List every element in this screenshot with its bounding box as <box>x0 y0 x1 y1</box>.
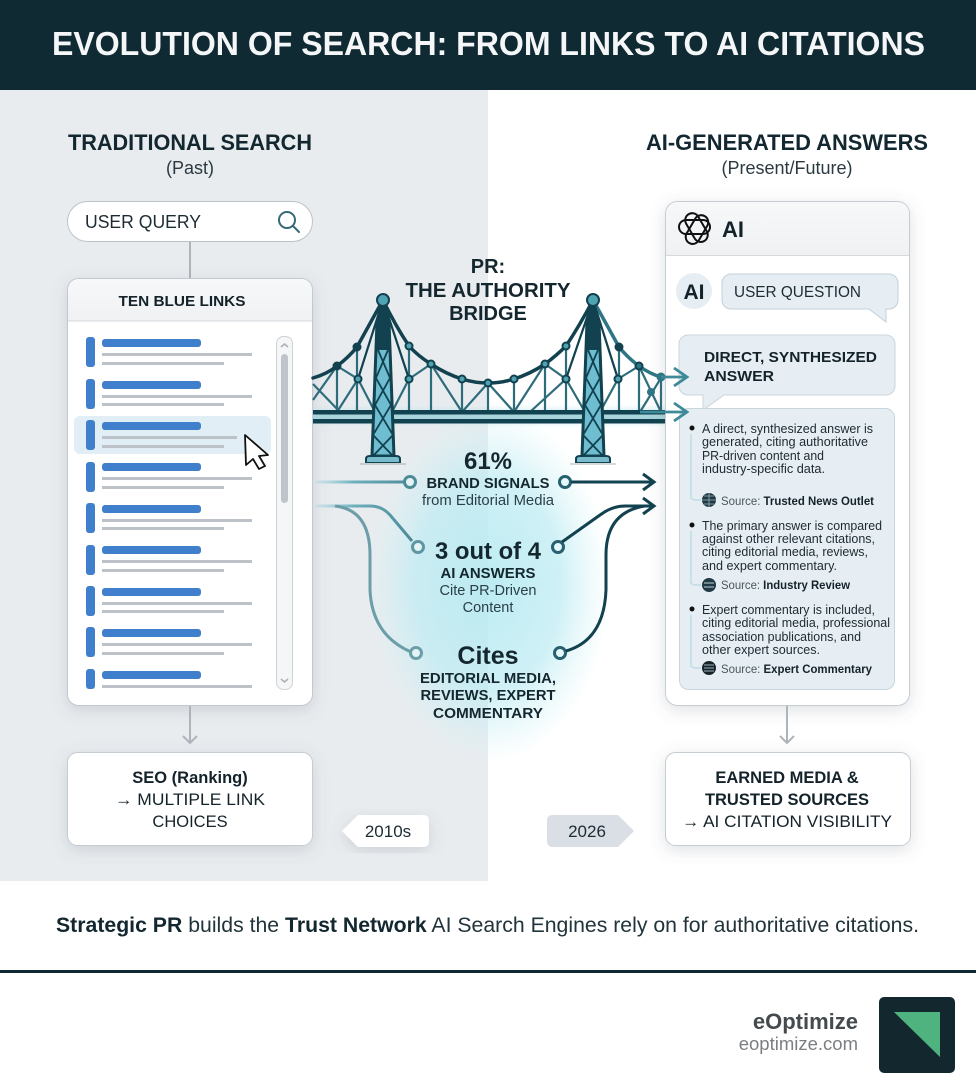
heading: AI-generated answers <box>646 130 928 178</box>
avatar: AI: AI <box>684 281 704 304</box>
cable nodes <box>334 294 664 395</box>
main cable <box>313 300 661 383</box>
answer block 3: Expert commentary is included, <box>702 603 875 617</box>
background: right present panel <box>488 90 976 881</box>
answer block 1 <box>690 422 874 508</box>
bubble: direct answer <box>679 335 895 410</box>
heading: AI-generated answers: AI-GENERATED ANSWERS <box>646 130 928 155</box>
box: earned media: → AI CITATION VISIBILITY <box>682 813 892 831</box>
connector: cites right <box>554 506 645 658</box>
tag: 2010s: 2010s <box>365 822 411 841</box>
background: left past panel <box>0 90 488 881</box>
bubble: user question: USER QUESTION <box>734 284 861 301</box>
arrow: answer to earned media <box>780 706 794 743</box>
panel: ten blue links <box>68 278 312 706</box>
connector: brand signals left <box>315 476 416 488</box>
stat: 3 out of 4: 3 out of 4 <box>435 538 542 565</box>
stat: 61% brand signals: 61% <box>464 448 512 475</box>
stat: 61% brand signals: from Editorial Media <box>422 493 555 509</box>
truss members <box>313 346 661 412</box>
right tower <box>570 304 616 465</box>
arrow: bridge cable into answer <box>661 368 687 386</box>
scrollbar <box>276 336 292 690</box>
connector: query to list <box>189 241 191 278</box>
answer block 1: generated, citing authoritative <box>702 435 868 449</box>
answer block 1: PR-driven content and <box>702 449 824 463</box>
title banner <box>0 0 976 90</box>
title banner: EVOLUTION OF SEARCH: FROM LINKS TO AI CITATIONS <box>52 25 925 62</box>
box: earned media: EARNED MEDIA & <box>715 769 859 787</box>
caption: Strategic PR builds the Trust Network AI Search Engines rely on for authoritative citations. <box>56 914 919 937</box>
answer block 2: The primary answer is compared <box>702 519 882 533</box>
box: SEO ranking: CHOICES <box>152 813 228 831</box>
bubble: user question <box>722 274 898 322</box>
answer block 3: other expert sources. <box>702 643 820 657</box>
heading: traditional search <box>68 130 312 178</box>
search box: user query <box>68 202 312 242</box>
arrow: list to SEO <box>183 706 197 743</box>
answer block 2: citing editorial media, reviews, <box>702 545 868 559</box>
answer block 2: and expert commentary. <box>702 559 837 573</box>
stat: cites: COMMENTARY <box>433 706 543 722</box>
answer block 3: citing editorial media, professional <box>702 616 890 630</box>
answer block 1: industry-specific data. <box>702 462 825 476</box>
box: SEO ranking: → MULTIPLE LINK <box>115 791 265 809</box>
stat: 3 out of 4: Cite PR-Driven <box>440 583 536 599</box>
bubble: direct answer: ANSWER <box>704 368 774 385</box>
arrow: bridge deck into answer <box>640 403 687 421</box>
road deck <box>313 410 685 424</box>
footer brand text <box>739 1009 858 1054</box>
heading: AI-generated answers: (Present/Future) <box>721 158 853 178</box>
heading: PR the authority bridge: BRIDGE <box>449 303 527 325</box>
stat: cites: REVIEWS, EXPERT <box>420 688 556 704</box>
connector: AI answers right <box>552 498 654 552</box>
answer block 3 <box>690 603 890 676</box>
search box: user query: USER QUERY <box>85 212 201 232</box>
footer rule <box>0 970 976 973</box>
footer brand text: eoptimize.com <box>739 1033 858 1054</box>
avatar: AI <box>676 273 712 309</box>
highlighted row <box>74 416 271 454</box>
tag: 2010s <box>342 815 429 847</box>
connector: cites left <box>335 506 422 658</box>
panel: AI answer card <box>666 202 910 706</box>
icon: cursor <box>245 435 268 469</box>
stat: 61% brand signals <box>422 448 555 509</box>
answer block 1: A direct, synthesized answer is <box>702 422 873 436</box>
box: earned media: TRUSTED SOURCES <box>705 791 869 809</box>
tag: 2026: 2026 <box>568 822 606 841</box>
panel: answer details <box>680 408 894 690</box>
stat: 61% brand signals: BRAND SIGNALS <box>426 476 550 492</box>
tag: 2026 <box>547 815 634 847</box>
heading: traditional search: (Past) <box>166 158 214 178</box>
deck glow <box>313 408 685 424</box>
connector: AI answers left <box>315 506 424 552</box>
answer block 2: against other relevant citations, <box>702 532 875 546</box>
stat: cites <box>420 642 556 722</box>
heading: traditional search: TRADITIONAL SEARCH <box>68 130 312 155</box>
connector: brand signals right <box>560 474 654 490</box>
footer brand text: eOptimize <box>753 1009 858 1034</box>
heading: PR the authority bridge: THE AUTHORITY <box>406 280 571 302</box>
left tower <box>360 304 406 465</box>
answer block 2 <box>690 519 882 592</box>
icon: bridge <box>313 294 685 465</box>
center glow <box>366 407 610 763</box>
stat: 3 out of 4: AI ANSWERS <box>440 566 536 582</box>
stat: 3 out of 4 <box>435 538 542 616</box>
heading: PR the authority bridge <box>406 256 571 325</box>
icon: AI knot logo <box>679 211 711 246</box>
panel: AI answer card: AI <box>722 217 744 242</box>
logo: eOptimize <box>879 997 955 1073</box>
stat: cites: Cites <box>457 642 519 670</box>
bubble: direct answer: DIRECT, SYNTHESIZED <box>704 349 877 366</box>
stat: 3 out of 4: Content <box>463 600 513 616</box>
stat: cites: EDITORIAL MEDIA, <box>420 671 556 687</box>
icon: magnifier <box>279 212 299 232</box>
link rows <box>86 337 252 689</box>
box: SEO ranking: SEO (Ranking) <box>132 769 248 787</box>
answer block 3: Source: Expert Commentary <box>721 662 872 676</box>
box: earned media <box>666 752 910 846</box>
answer block 3: association publications, and <box>702 630 861 644</box>
panel: ten blue links: TEN BLUE LINKS <box>118 294 246 310</box>
heading: PR the authority bridge: PR: <box>471 256 505 278</box>
answer block 2: Source: Industry Review <box>721 578 851 592</box>
answer block 1: Source: Trusted News Outlet <box>721 494 874 508</box>
box: SEO ranking <box>68 752 312 846</box>
